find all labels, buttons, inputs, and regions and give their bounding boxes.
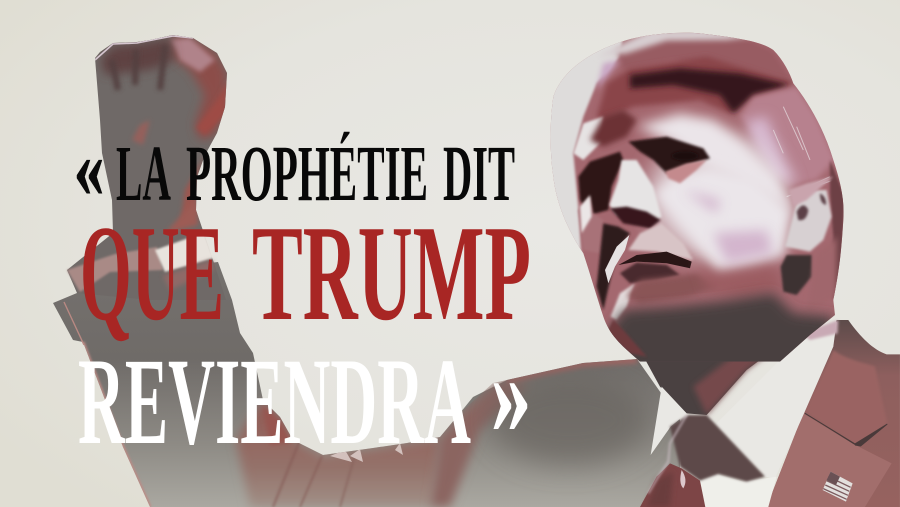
upper lip	[628, 223, 693, 260]
line two: QUE	[80, 197, 224, 349]
lower lapel	[767, 413, 892, 507]
neck	[627, 320, 813, 415]
left forehead	[573, 117, 603, 160]
sideburn strands	[773, 107, 833, 197]
eyelid	[665, 160, 707, 183]
suit and collar	[627, 320, 900, 507]
sleeve and shoulder	[53, 262, 680, 507]
ear	[785, 190, 832, 252]
crease highlight	[605, 235, 629, 283]
top hair rim	[617, 32, 795, 85]
crease highlight lower	[611, 283, 635, 320]
shadow under ear	[781, 255, 812, 295]
nostril	[610, 207, 661, 228]
sideburn	[788, 177, 833, 207]
back hair right	[828, 160, 844, 298]
skin base	[550, 32, 844, 362]
neck red side	[693, 330, 800, 415]
raised arm and fist	[50, 30, 680, 507]
cheek light	[653, 167, 792, 270]
american flag pin	[823, 472, 853, 502]
lapel notch	[805, 413, 887, 446]
line one: PROPHÉTIE	[186, 131, 428, 218]
lower cheek red	[698, 259, 778, 293]
collar shadow strip	[802, 320, 838, 340]
hair lilac light	[747, 117, 797, 180]
ear inner	[797, 193, 826, 220]
fist	[67, 35, 227, 293]
shirt collar right	[716, 322, 837, 478]
line one	[116, 131, 515, 218]
mouth	[618, 252, 692, 268]
cheek left strip	[578, 197, 603, 253]
shirt collar left	[651, 387, 687, 455]
headline	[74, 119, 531, 470]
dark hair shadow	[630, 68, 790, 113]
portrait head	[550, 32, 844, 362]
right eye socket	[628, 137, 710, 173]
nose	[609, 160, 662, 223]
line one: DIT	[443, 131, 515, 218]
lower lip	[620, 263, 680, 283]
right hair	[740, 87, 835, 187]
opening quote: «	[74, 119, 104, 215]
left eye socket	[578, 152, 623, 215]
white left hair	[550, 41, 624, 252]
jacket right	[767, 320, 900, 507]
tie knot	[670, 415, 765, 482]
hair grey rim	[608, 32, 748, 58]
iris highlight	[672, 151, 698, 161]
line two: TRUMP	[252, 197, 531, 349]
closing quote: »	[491, 328, 531, 459]
chin	[627, 273, 720, 303]
shirt front	[700, 474, 777, 507]
line one: LA	[116, 131, 171, 218]
cheek left highlight	[580, 195, 592, 233]
cheek lilac	[683, 190, 773, 263]
jaw left	[607, 320, 647, 357]
brow reddish	[590, 110, 637, 147]
lilac streak	[597, 60, 620, 90]
forehead hair	[597, 57, 793, 120]
neck right	[807, 237, 837, 313]
temple light	[637, 113, 793, 213]
line two	[80, 197, 531, 349]
nose crease shadow	[597, 223, 630, 310]
tie blade	[640, 415, 705, 507]
upper lapel	[805, 350, 887, 446]
shirt cuff	[64, 233, 214, 345]
line three: REVIENDRA	[78, 333, 471, 470]
face glow	[647, 133, 787, 260]
jaw shadow neck	[597, 293, 833, 380]
